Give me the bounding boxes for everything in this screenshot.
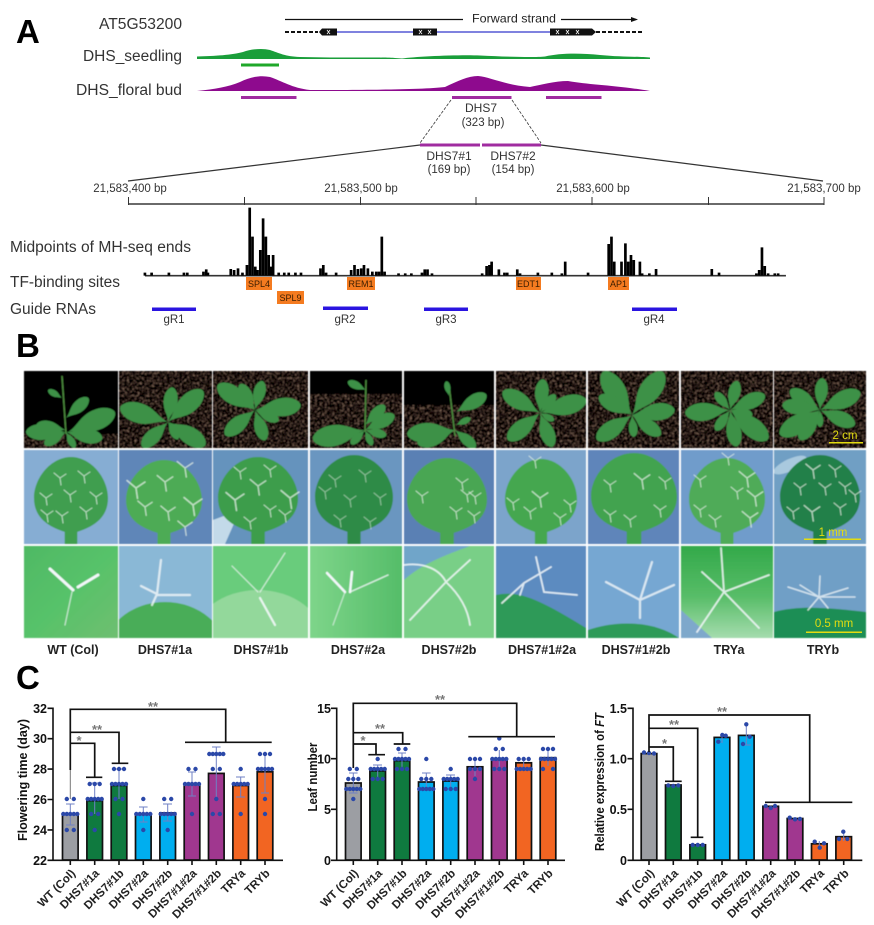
photo: DHS7#1#2b trichome (587, 545, 680, 639)
label: DHS7#1 (426, 149, 472, 176)
photo: TRYa trichome (680, 545, 774, 639)
x axis labels: DHS7#2a (685, 867, 731, 912)
photo: DHS7#1b trichome (212, 545, 309, 639)
photo: DHS7#1#2b leaf (587, 449, 680, 545)
x axis labels (35, 867, 273, 921)
track: DHS seedling (197, 49, 650, 59)
label: guide RNAs: Guide RNAs (10, 301, 96, 318)
panel letter B: B (16, 327, 40, 364)
label: DHS7#1: DHS7#1 (426, 149, 472, 163)
forward strand arrow: Forward strand (472, 12, 556, 26)
strain labels: DHS7#1#2b (602, 643, 671, 657)
axes: 24 (33, 824, 47, 838)
error bars (722, 724, 844, 848)
x axis labels: TRYb (242, 867, 273, 897)
row: trichome close-ups (24, 546, 866, 708)
coordinate axis: 21,583,400 bp (93, 183, 167, 195)
track: DHS floral bud (197, 76, 650, 91)
axes: 15 (317, 702, 331, 716)
panel letter A: A (16, 13, 40, 50)
x axis labels: DHS7#2b (413, 867, 458, 912)
x axis labels (318, 867, 556, 921)
photo: DHS7#1a leaf (118, 449, 213, 545)
significance brackets: ** (669, 717, 680, 732)
label: DHS floral bud: DHS_floral bud (76, 82, 182, 99)
row: first leaves (24, 450, 866, 546)
TF site: EDT1: EDT1 (517, 279, 540, 289)
x axis labels: TRYa (219, 867, 249, 896)
label: DHS7#2: DHS7#2 (490, 149, 536, 163)
significance brackets: ** (148, 699, 159, 714)
scale bar: 2 cm (829, 430, 863, 444)
guide RNA: gR2: gR2 (334, 314, 356, 326)
photo: DHS7#1a trichome (118, 545, 213, 639)
photo: TRYb leaf (773, 449, 867, 545)
forward strand arrow (285, 12, 638, 26)
axes: 1.0 (610, 752, 627, 766)
data points (346, 738, 555, 799)
photo: WT leaf (23, 449, 119, 545)
strain labels: DHS7#1a (138, 643, 193, 657)
axes: 22 (33, 854, 47, 868)
significance brackets: ** (375, 721, 386, 736)
photo: TRYb plant (773, 370, 867, 449)
x axis labels: DHS7#2b (709, 867, 754, 912)
photo: TRYb trichome (773, 545, 867, 639)
significance brackets (70, 699, 272, 799)
label: DHS7#2: (154 bp) (492, 164, 535, 176)
chart: leaf number (306, 692, 565, 921)
significance brackets: ** (92, 722, 103, 737)
strain labels: DHS7#1b (234, 643, 289, 657)
scale bar: 0.5 mm (806, 618, 862, 633)
axes: 1.5 (610, 702, 627, 716)
strain labels: DHS7#2b (422, 643, 477, 657)
coordinate axis: 21,583,500 bp (324, 183, 398, 195)
photo: DHS7#2b leaf (403, 449, 495, 545)
panel B: plant photo grid (24, 366, 866, 708)
label: DHS seedling: DHS_seedling (83, 48, 182, 65)
axes (33, 702, 283, 868)
chart: flowering time (16, 699, 283, 921)
panel A: genome browser tracks (10, 12, 861, 326)
x axis labels: DHS7#1#2a (146, 867, 200, 921)
label: DHS7 (462, 101, 505, 129)
error bars (349, 750, 548, 793)
x axis labels: DHS7#1#2a (429, 867, 483, 921)
guide RNA: gR4 (632, 308, 677, 326)
panel letter C: C (16, 659, 40, 696)
label: midpoints: Midpoints of MH-seq ends (10, 239, 191, 256)
photo: WT trichome (23, 545, 119, 639)
photo: DHS7#1#2a leaf (495, 449, 587, 545)
significance brackets (649, 704, 852, 837)
axes (610, 702, 862, 868)
x axis labels: WT (Col) (318, 867, 361, 910)
axes: 0 (620, 854, 627, 868)
axes (317, 702, 565, 868)
scale bar: 1 mm (804, 527, 861, 540)
x axis labels: WT (Col) (614, 867, 657, 910)
guide RNA: gR2 (323, 306, 368, 326)
label: gene name: AT5G53200 (99, 16, 182, 33)
strain labels: DHS7#2a (331, 643, 386, 657)
photo: DHS7#2b plant (403, 370, 495, 449)
scale bar: 0.5 mm: 0.5 mm (815, 618, 853, 630)
guide RNA: gR3 (424, 308, 468, 326)
x axis labels: DHS7#1a (636, 867, 682, 912)
strain labels: TRYb (807, 643, 839, 657)
axes: 26 (33, 793, 47, 807)
coordinate axis: 21,583,600 bp (556, 183, 630, 195)
significance brackets: * (662, 736, 668, 751)
x axis labels: DHS7#1#2b (170, 867, 224, 921)
x axis labels: DHS7#1#2b (749, 867, 803, 921)
bars: floral bud DHS (241, 96, 602, 99)
scale bar: 1 mm: 1 mm (819, 527, 847, 539)
photo: DHS7#1a plant (118, 370, 213, 449)
TF site: SPL4: SPL4 (248, 279, 270, 289)
axes: 30 (33, 732, 47, 746)
significance brackets: ** (435, 692, 446, 707)
photo: DHS7#2b trichome (403, 545, 495, 639)
significance brackets: * (76, 733, 82, 748)
guide RNA: gR1: gR1 (163, 314, 185, 326)
TF site: SPL9 (277, 291, 304, 304)
label: DHS7#1: (169 bp) (428, 164, 471, 176)
data points (644, 724, 847, 848)
coordinate axis (93, 183, 861, 205)
chart: FT expression (593, 702, 862, 921)
TF site: AP1 (608, 277, 629, 290)
gene model (285, 28, 642, 36)
x axis labels: DHS7#1a (340, 867, 386, 912)
label: TF-binding sites: TF-binding sites (10, 274, 120, 291)
strain labels: DHS7#1#2a (508, 643, 577, 657)
bars (62, 772, 273, 860)
guide RNA: gR1 (152, 308, 196, 326)
strain labels (47, 643, 839, 657)
y axis title: Relative expression of FT (593, 712, 607, 851)
bar: seedling DHS (241, 64, 279, 66)
bars (641, 735, 852, 860)
label: DHS7: (323 bp) (462, 117, 505, 129)
axes: 5 (324, 803, 331, 817)
x axis labels: DHS7#2b (130, 867, 175, 912)
TF site: SPL4 (246, 277, 272, 290)
photo: TRYa plant (680, 370, 774, 449)
zoom connector lines (128, 100, 823, 181)
x axis labels: DHS7#1b (364, 867, 410, 912)
axes: 10 (317, 752, 331, 766)
photo: DHS7#2a plant (309, 370, 403, 449)
photo: DHS7#1b leaf (212, 449, 309, 545)
x axis labels (614, 867, 852, 921)
strain labels: TRYa (714, 643, 745, 657)
data points (63, 754, 272, 830)
photo: DHS7#1#2b plant (587, 370, 680, 449)
TF site: REM1 (347, 277, 375, 290)
x axis labels: TRYb (821, 867, 852, 897)
TF site: REM1: REM1 (348, 279, 374, 289)
x axis labels: DHS7#1a (57, 867, 103, 912)
x axis labels: DHS7#2a (106, 867, 152, 912)
significance brackets (353, 692, 555, 768)
y axis title: Flowering time (day) (16, 719, 30, 841)
photo: DHS7#1b plant (212, 370, 309, 449)
x axis labels: TRYa (502, 867, 532, 896)
axes: 32 (33, 702, 47, 716)
scale bar: 2 cm: 2 cm (833, 430, 857, 442)
label: DHS7#2 (490, 149, 536, 176)
photo: WT plant (23, 370, 119, 449)
coordinate axis: 21,583,700 bp (787, 183, 861, 195)
label: DHS7: DHS7 (465, 101, 497, 115)
x axis labels: DHS7#1b (81, 867, 127, 912)
axes: 0 (324, 854, 331, 868)
significance brackets: * (360, 733, 366, 748)
TF site: AP1: AP1 (610, 279, 627, 289)
histogram: MH-seq midpoints (145, 208, 786, 276)
guide RNA: gR3: gR3 (435, 314, 457, 326)
strain labels: WT (Col) (47, 643, 99, 657)
bars (346, 758, 556, 860)
row: whole plants (24, 366, 866, 453)
x axis labels: DHS7#1b (660, 867, 706, 912)
x axis labels: WT (Col) (35, 867, 78, 910)
TF site: SPL9: SPL9 (279, 293, 302, 303)
x axis labels: DHS7#1#2a (725, 867, 779, 921)
y axis title: Leaf number (306, 742, 320, 812)
photo: DHS7#2a trichome (309, 545, 403, 639)
guide RNA: gR4: gR4 (643, 314, 665, 326)
x axis labels: DHS7#1#2b (453, 867, 507, 921)
photo: TRYa leaf (680, 449, 774, 545)
photo: DHS7#2a leaf (309, 449, 403, 545)
axes: 0.5 (610, 803, 627, 817)
photo: DHS7#1#2a trichome (495, 545, 587, 639)
x axis labels: TRYb (525, 867, 556, 897)
x axis labels: TRYa (798, 867, 828, 896)
error bars (66, 747, 269, 825)
photo: DHS7#1#2a plant (495, 370, 587, 449)
bars: DHS7 subdivisions (420, 144, 541, 146)
x axis labels: DHS7#2a (389, 867, 435, 912)
significance brackets: ** (717, 704, 728, 719)
axes: 28 (33, 762, 47, 776)
